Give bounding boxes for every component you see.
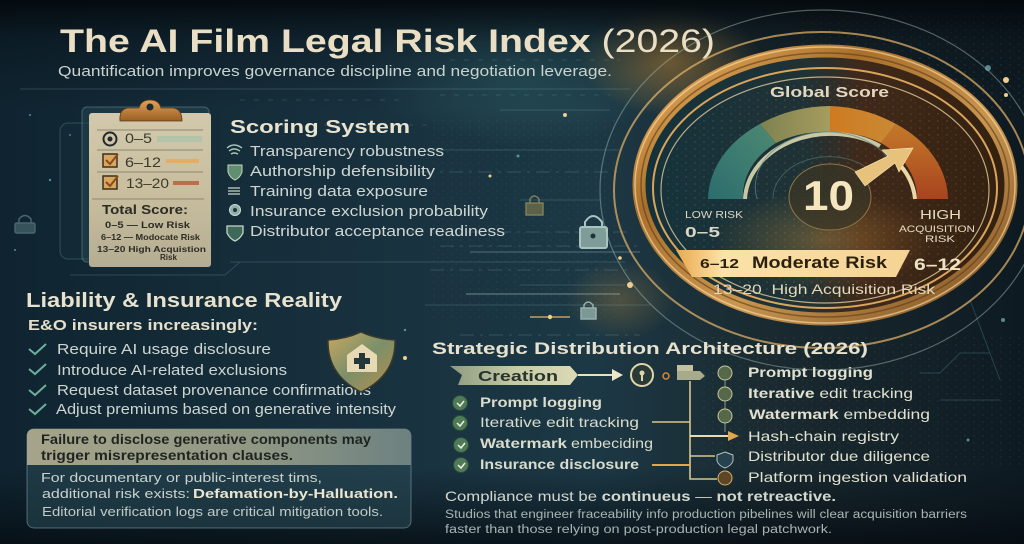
score row: 6-12 xyxy=(103,154,199,170)
distribution checklist: Platform ingestion validation xyxy=(748,469,967,485)
total score: 0–5 — Low Risk xyxy=(105,220,191,231)
closing note xyxy=(445,509,967,536)
insurer checklist xyxy=(29,342,397,418)
low risk label: LOW RISK xyxy=(685,209,743,221)
distribution checklist: Hash-chain registry xyxy=(748,428,899,444)
total score: 6–12 — Modocate Risk xyxy=(101,232,200,242)
gauge value: 10 xyxy=(803,172,854,219)
distribution checklist xyxy=(717,364,967,485)
panel: global score gauge xyxy=(600,10,1024,370)
total score xyxy=(97,202,206,262)
creation checklist: Iterative edit tracking xyxy=(480,414,639,430)
icon: padlock left xyxy=(15,216,35,233)
low risk label xyxy=(685,209,743,241)
callout: misrepresentation warning: additional risk exists: xyxy=(42,486,190,501)
distribution checklist: Prompt logging xyxy=(748,364,873,380)
gauge hub xyxy=(789,164,871,230)
panel: scoring system xyxy=(227,117,505,241)
high risk label: ACQUISITION xyxy=(899,224,975,235)
compliance statement: Compliance must be continueus — not retreactive. xyxy=(445,488,836,504)
callout: misrepresentation warning: Failure to disclose generative components may xyxy=(41,431,371,447)
total score: Total Score: xyxy=(102,202,188,217)
creation ribbon and arrow: Creation xyxy=(478,368,558,385)
icon: server node xyxy=(663,365,705,380)
total score: 13–20 High Acquistion xyxy=(97,244,206,254)
distribution checklist: Watermark embedding xyxy=(749,406,930,422)
icon: padlock lower xyxy=(581,302,596,319)
icon: insurance shield xyxy=(328,332,395,392)
creation checklist: Insurance disclosure xyxy=(480,456,639,472)
creation checklist: Watermark xyxy=(480,435,567,451)
heading: strategic distribution: Strategic Distribution Architecture (2026) xyxy=(432,339,868,358)
creation checklist: Prompt logging xyxy=(480,394,602,410)
criteria list: Authorship defensibility xyxy=(250,163,436,180)
insurer checklist: Require AI usage disclosure xyxy=(57,342,271,358)
closing note: Studios that engineer fraceability info production pibelines will clear acquisition barriers xyxy=(445,509,967,521)
score row: 13-20: 13–20 xyxy=(126,175,169,191)
score row: 13-20 xyxy=(103,175,199,191)
heading: liability: Liability & Insurance Reality xyxy=(26,290,343,312)
criteria list: Insurance exclusion probability xyxy=(250,203,489,220)
score row: 0-5: 0–5 xyxy=(125,130,152,146)
creation checklist: embeciding xyxy=(571,435,653,451)
insurer checklist: Adjust premiums based on generative intensity xyxy=(56,402,397,418)
criteria list xyxy=(250,143,505,240)
moderate risk band: Moderate Risk xyxy=(752,253,888,272)
criteria list: Training data exposure xyxy=(250,183,428,200)
total score: Risk xyxy=(160,253,178,262)
connector lines xyxy=(652,380,739,479)
distribution checklist: Iterative edit tracking xyxy=(748,385,913,401)
subtitle: Quantification improves governance discipline and negotiation leverage. xyxy=(58,63,612,80)
icon: padlock faint xyxy=(526,196,543,215)
icon: lock node xyxy=(631,364,653,386)
clipboard paper xyxy=(89,113,211,267)
callout: misrepresentation warning: For documentary or public-interest tims, xyxy=(41,470,322,485)
gauge needle xyxy=(855,148,913,186)
callout: misrepresentation warning: trigger misrepresentation clauses. xyxy=(41,447,293,463)
gauge rings xyxy=(600,10,1024,370)
high risk label: HIGH xyxy=(920,207,961,222)
clipboard clip xyxy=(120,100,182,121)
insurer checklist: Introduce AI-related exclusions xyxy=(57,363,287,379)
gauge colored arc xyxy=(708,106,948,199)
panel: liability and insurance xyxy=(26,290,411,528)
high risk label: RISK xyxy=(925,234,956,245)
heading: scoring system: Scoring System xyxy=(230,117,410,137)
subheading: E&O: E&O insurers increasingly: xyxy=(28,317,258,334)
icon: padlock center xyxy=(580,216,607,248)
creation ribbon and arrow xyxy=(450,366,623,385)
closing note: faster than those relying on post-production legal patchwork. xyxy=(445,524,832,536)
low risk label: 0–5 xyxy=(685,224,720,241)
gauge heading: Global Score xyxy=(770,84,889,101)
distribution checklist: Distributor due diligence xyxy=(748,448,930,464)
score row: 0-5 xyxy=(104,130,202,146)
criteria list: Transparency robustness xyxy=(250,143,444,160)
criteria list: Distributor acceptance readiness xyxy=(250,223,505,240)
callout: misrepresentation warning: Defamation-by-Halluation. xyxy=(193,486,398,501)
moderate range label: 6–12 xyxy=(914,255,961,274)
score row: 6-12: 6–12 xyxy=(125,154,161,170)
panel: strategic distribution architecture xyxy=(432,339,967,536)
callout: misrepresentation warning xyxy=(27,429,411,528)
callout: misrepresentation warning: Editorial verification logs are critical mitigation tools. xyxy=(42,505,383,519)
high acquisition label: 13–20 High Acquisition Risk xyxy=(713,282,935,297)
moderate risk band: 6–12 xyxy=(700,256,739,271)
creation checklist xyxy=(452,394,653,472)
criteria icons xyxy=(227,145,243,241)
moderate risk band xyxy=(676,250,910,277)
title: The AI Film Legal Risk Index (2026) xyxy=(60,23,715,59)
high risk label xyxy=(899,207,975,245)
insurer checklist: Request dataset provenance confirmations xyxy=(57,383,371,399)
panel: scoring clipboard xyxy=(60,100,211,267)
